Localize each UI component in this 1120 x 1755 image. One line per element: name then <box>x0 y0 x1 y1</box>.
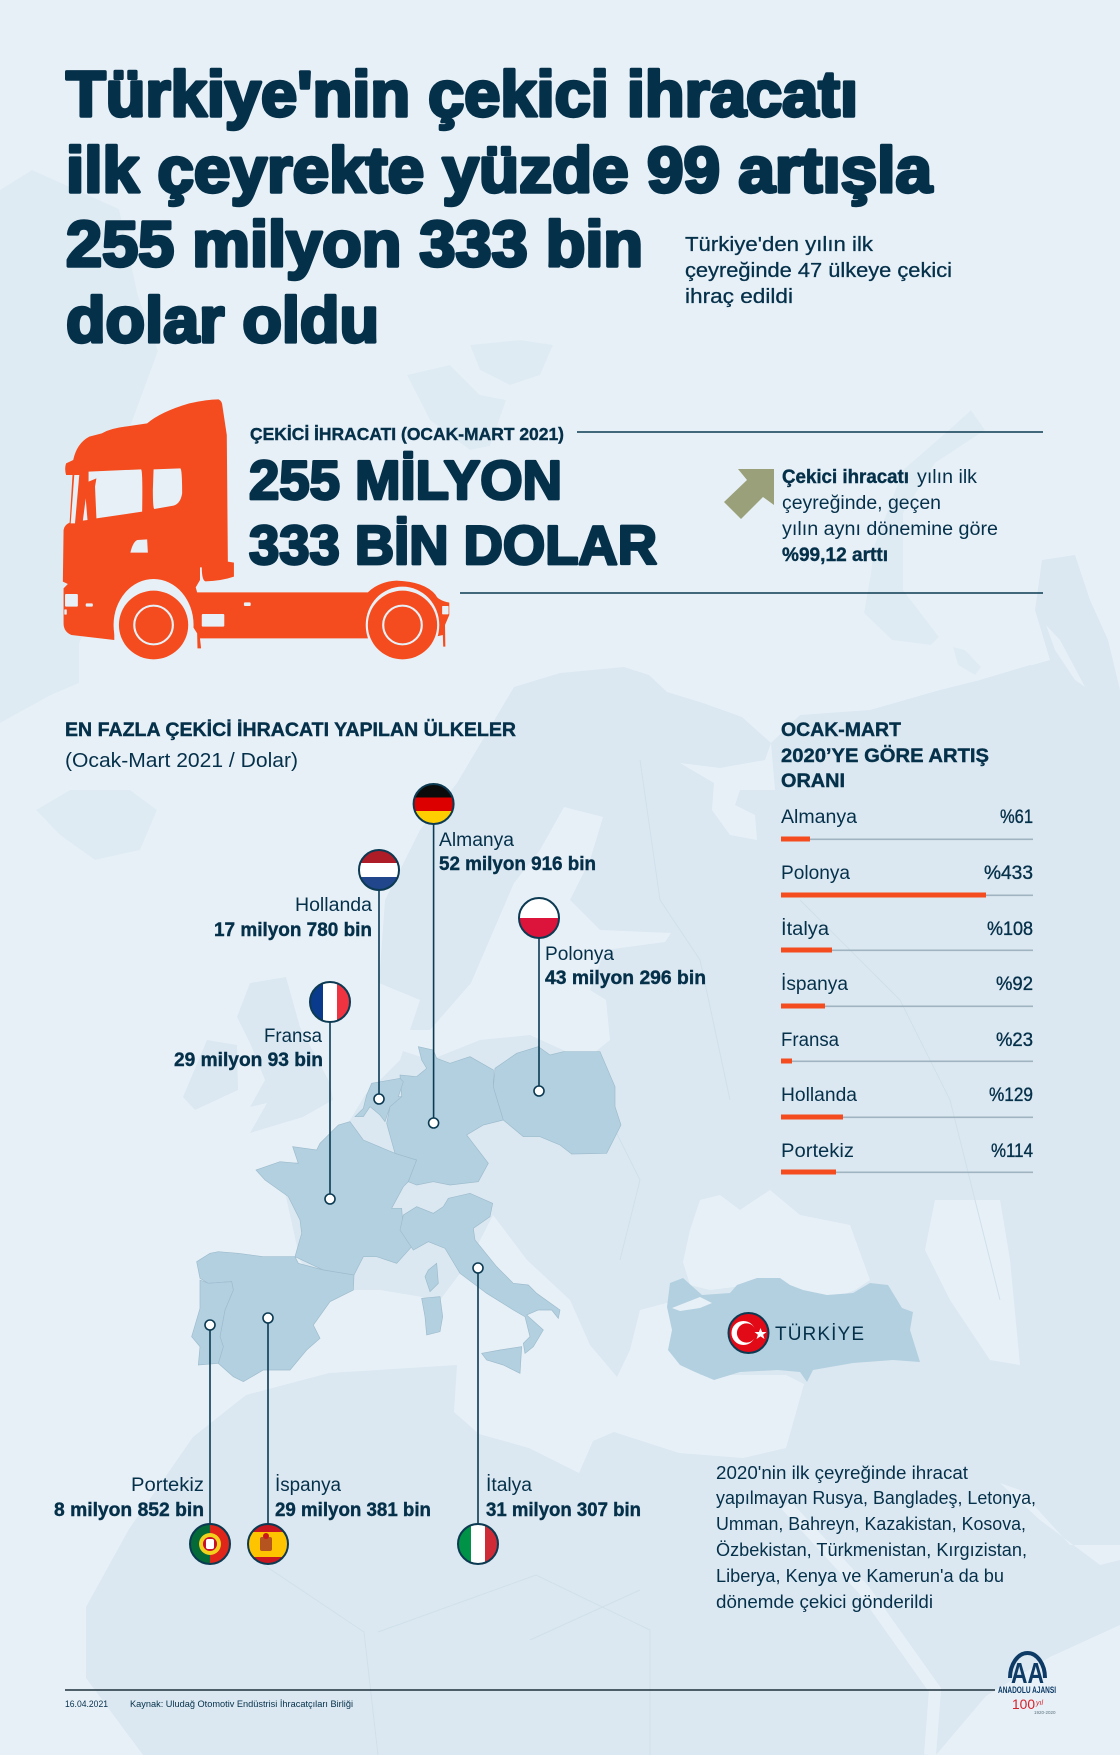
pin: Almanya: Almanya <box>439 830 514 851</box>
subtitle: çeyreğinde 47 ülkeye çekici <box>685 260 952 282</box>
subtitle: Türkiye'den yılın ilk <box>685 234 874 256</box>
row: Portekiz <box>781 1141 1033 1174</box>
icon: truck <box>63 399 449 671</box>
icon: up arrow <box>724 469 774 519</box>
heading: increase rates: OCAK-MART <box>781 720 901 741</box>
title <box>66 58 932 356</box>
footer: date and source: 16.04.2021 <box>65 1699 108 1709</box>
increase note: çeyreğinde, geçen <box>782 493 941 514</box>
pin: Portekiz: Portekiz <box>131 1475 204 1496</box>
heading: top countries <box>65 720 516 772</box>
stat label: ÇEKİCİ İHRACATI (OCAK-MART 2021) <box>250 424 564 444</box>
stat value: 333 BİN DOLAR <box>249 514 657 576</box>
note paragraph <box>716 1463 1036 1612</box>
pin: Portekiz: 8 milyon 852 bin <box>54 1500 204 1521</box>
pin: Portekiz <box>54 1320 230 1564</box>
heading: increase rates: ORANI <box>781 771 845 792</box>
heading: top countries: (Ocak-Mart 2021 / Dolar) <box>65 750 298 772</box>
row: Portekiz: %114 <box>991 1141 1033 1162</box>
row: İspanya: %92 <box>996 974 1033 995</box>
pin: Hollanda <box>214 850 399 1104</box>
logo: Anadolu Ajansı: 1920-2020 <box>1034 1710 1056 1715</box>
row: İspanya: İspanya <box>781 974 848 995</box>
marker: Türkiye <box>728 1313 864 1353</box>
logo: Anadolu Ajansı: ANADOLU AJANSI <box>998 1685 1056 1695</box>
increase note <box>782 467 998 566</box>
pin: Polonya: 43 milyon 296 bin <box>545 968 706 989</box>
note paragraph: Liberya, Kenya ve Kamerun'a da bu <box>716 1566 1004 1586</box>
note paragraph: dönemde çekici gönderildi <box>716 1592 933 1612</box>
title: Türkiye'nin çekici ihracatı <box>66 58 858 130</box>
pin: Polonya <box>519 898 706 1096</box>
pin: Fransa: 29 milyon 93 bin <box>174 1050 323 1071</box>
pin: Fransa <box>174 982 351 1204</box>
row: İtalya <box>781 919 1033 952</box>
increase note: yılın ilk <box>917 467 978 488</box>
note paragraph: Umman, Bahreyn, Kazakistan, Kosova, <box>716 1514 1026 1534</box>
row: İtalya: %108 <box>987 919 1033 940</box>
row: Fransa: Fransa <box>781 1030 839 1051</box>
row: Fransa <box>781 1030 1033 1064</box>
increase note: yılın aynı dönemine göre <box>782 519 998 540</box>
heading: increase rates: 2020’YE GÖRE ARTIŞ <box>781 746 989 767</box>
pin: İtalya: 31 milyon 307 bin <box>486 1500 641 1521</box>
bar list: increase rates <box>781 807 1033 1174</box>
increase note: Çekici ihracatı <box>782 467 909 488</box>
note paragraph: Özbekistan, Türkmenistan, Kırgızistan, <box>716 1540 1027 1560</box>
subtitle: ihraç edildi <box>685 286 793 308</box>
increase note: %99,12 arttı <box>782 545 888 566</box>
stat value: 255 MİLYON <box>249 449 562 511</box>
pin: Almanya <box>414 784 596 1128</box>
pin: İtalya <box>458 1263 641 1564</box>
stat value <box>249 449 657 576</box>
title: 255 milyon 333 bin <box>66 208 643 280</box>
seas <box>395 807 671 1060</box>
highlighted countries map <box>192 1047 621 1382</box>
pin: İspanya <box>248 1313 431 1564</box>
title: dolar oldu <box>66 284 379 356</box>
row: Polonya: Polonya <box>781 863 850 884</box>
row: Polonya: %433 <box>984 863 1033 884</box>
row: Hollanda <box>781 1085 1033 1120</box>
logo: Anadolu Ajansı: AA <box>1011 1658 1044 1690</box>
row: Almanya <box>781 807 1033 842</box>
pin: Almanya: 52 milyon 916 bin <box>439 854 596 875</box>
note paragraph: yapılmayan Rusya, Bangladeş, Letonya, <box>716 1488 1036 1508</box>
note paragraph: 2020'nin ilk çeyreğinde ihracat <box>716 1463 968 1483</box>
row: İtalya: İtalya <box>781 919 829 940</box>
heading: top countries: EN FAZLA ÇEKİCİ İHRACATI YAPILAN ÜLKELER <box>65 720 516 741</box>
row: Fransa: %23 <box>996 1030 1033 1051</box>
subtitle <box>685 234 952 308</box>
marker: Türkiye: TÜRKİYE <box>775 1324 864 1345</box>
pin: Fransa: Fransa <box>264 1026 322 1047</box>
pin: İtalya: İtalya <box>486 1475 532 1496</box>
row: İspanya <box>781 974 1033 1008</box>
logo: Anadolu Ajansı: yıl <box>1035 1700 1043 1707</box>
row: Portekiz: Portekiz <box>781 1141 854 1162</box>
row: Almanya: %61 <box>1000 807 1033 828</box>
pin: Hollanda: Hollanda <box>295 895 372 916</box>
pin: Polonya: Polonya <box>545 944 614 965</box>
row: Hollanda: Hollanda <box>781 1085 857 1106</box>
row: Almanya: Almanya <box>781 807 857 828</box>
pin: İspanya: 29 milyon 381 bin <box>275 1500 431 1521</box>
pin: Hollanda: 17 milyon 780 bin <box>214 920 372 941</box>
row: Polonya <box>781 863 1033 898</box>
row: Hollanda: %129 <box>989 1085 1033 1106</box>
map: Türkiye <box>667 1278 920 1382</box>
heading: increase rates <box>781 720 989 792</box>
logo: Anadolu Ajansı: 100 <box>1012 1696 1035 1712</box>
footer: date and source: Kaynak: Uludağ Otomotiv Endüstrisi İhracatçıları Birliği <box>130 1699 353 1709</box>
pin: İspanya: İspanya <box>275 1475 341 1496</box>
logo: Anadolu Ajansı <box>998 1653 1056 1715</box>
title: ilk çeyrekte yüzde 99 artışla <box>66 134 932 206</box>
